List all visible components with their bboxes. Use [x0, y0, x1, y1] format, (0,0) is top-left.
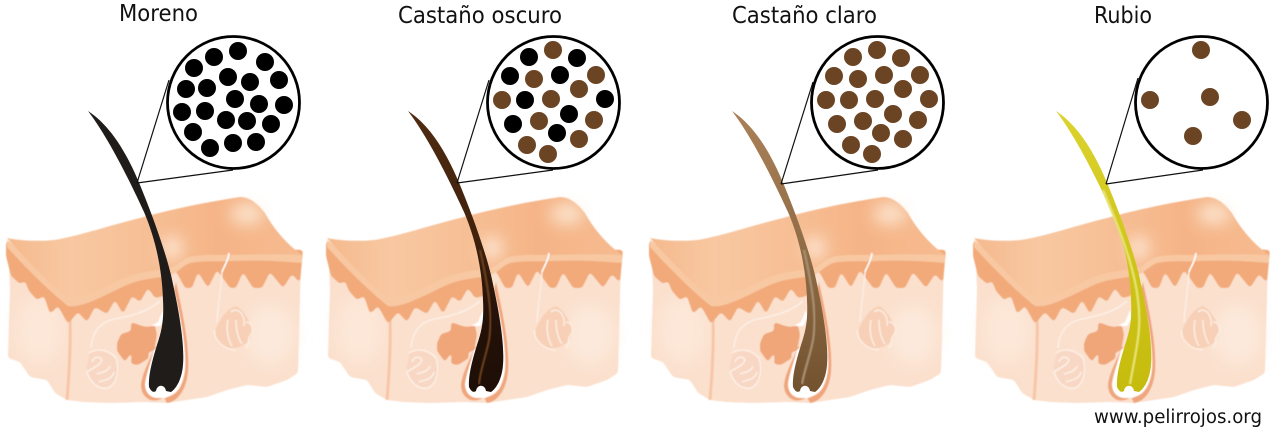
skin cross-section — [326, 197, 623, 403]
panel: Moreno — [6, 0, 303, 403]
panel: Rubio — [973, 1, 1270, 403]
magnified circle: brown pigment — [812, 36, 944, 168]
heading: Rubio: Rubio — [1094, 1, 1152, 29]
heading: Castaño oscuro: Castaño oscuro — [398, 1, 562, 29]
panel: Castaño oscuro — [326, 1, 623, 403]
hair: blond — [1056, 111, 1151, 392]
panel: Castaño claro — [649, 1, 946, 403]
zoom lines — [781, 82, 878, 184]
heading: Castaño claro: Castaño claro — [732, 1, 877, 29]
zoom lines — [137, 80, 233, 183]
hair: light brown — [732, 111, 827, 392]
source credit: www.pelirrojos.org — [1094, 407, 1262, 428]
zoom lines — [1106, 78, 1203, 184]
zoom lines — [457, 80, 553, 183]
magnified circle: sparse pigment — [1136, 36, 1268, 168]
hair: dark brown — [408, 111, 503, 392]
magnified circle: black pigment — [168, 36, 300, 168]
skin cross-section — [973, 197, 1270, 403]
skin cross-section — [649, 197, 946, 403]
hair: black — [88, 111, 183, 392]
skin cross-section — [6, 197, 303, 403]
magnified circle: mixed pigment — [488, 36, 620, 168]
